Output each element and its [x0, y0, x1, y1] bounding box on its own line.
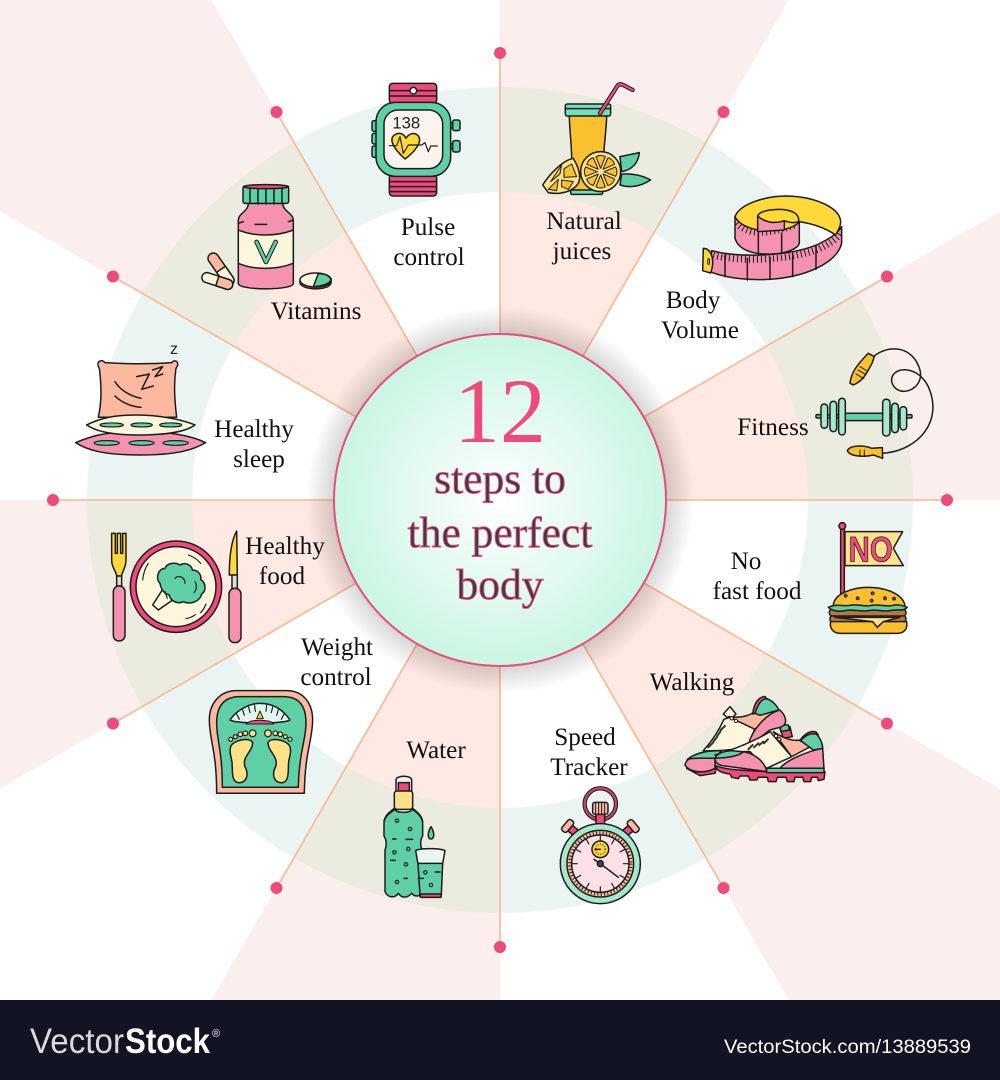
icon: sneakers: [685, 697, 825, 782]
label: water: Water: [406, 737, 466, 764]
icon: pillows: z: [170, 341, 178, 358]
label: healthy food: food: [259, 563, 305, 590]
label: healthy food: Healthy: [245, 533, 325, 560]
label: body volume: Volume: [661, 317, 739, 344]
panel: body volume: [661, 196, 842, 344]
label: fitness: Fitness: [737, 414, 809, 441]
title text: body: [456, 561, 544, 609]
icon: burger with no flag: NO: [849, 531, 893, 570]
icon: smart watch: [372, 83, 460, 196]
footer logo: Stock: [125, 1022, 210, 1061]
label: walking: Walking: [650, 669, 735, 696]
footer url: VectorStock.com/13889539: [724, 1036, 971, 1058]
icon: dumbbell and skipping rope: [816, 349, 933, 458]
label: weight control: Weight: [301, 634, 373, 661]
panel: weight control: [209, 634, 373, 793]
label: speed tracker: Tracker: [550, 754, 628, 781]
label: speed tracker: Speed: [554, 724, 616, 751]
label: vitamins: Vitamins: [271, 298, 361, 325]
label: body volume: Body: [666, 287, 721, 314]
panel: vitamins: [201, 185, 361, 325]
panel: water: [384, 737, 466, 897]
title text: the perfect: [408, 509, 592, 557]
label: no fast food: fast food: [713, 578, 802, 605]
icon: juice glass with lemons: [543, 84, 651, 194]
icon: vitamin bottle and pills: [201, 185, 331, 291]
icon: burger with no flag: [828, 523, 907, 633]
panel: natural juices: [543, 84, 651, 265]
central circle title: [334, 334, 666, 666]
icon: smart watch: 138: [392, 114, 420, 133]
icon: water bottle and glass: [384, 776, 445, 897]
central shadow: [306, 306, 694, 694]
label: healthy sleep: sleep: [233, 446, 285, 473]
icon: bathroom scale: [209, 691, 313, 793]
title number: 12: 12: [454, 360, 546, 462]
panel: fitness: [737, 349, 933, 458]
spokes with dots: [47, 47, 953, 953]
footer band: [0, 1000, 1000, 1080]
icon: measuring tape: [703, 196, 842, 280]
panel: healthy sleep: [76, 341, 294, 473]
label: pulse control: control: [393, 244, 465, 271]
panel: no fast food: [713, 523, 907, 633]
panel: walking: [650, 669, 825, 782]
title text: steps to: [434, 455, 566, 503]
icon: pillows: [76, 341, 206, 455]
label: natural juices: juices: [552, 238, 611, 265]
label: healthy sleep: Healthy: [214, 416, 294, 443]
footer logo: Vector: [30, 1022, 124, 1061]
label: pulse control: Pulse: [401, 214, 455, 241]
footer logo: ®: [212, 1028, 220, 1040]
icon: stopwatch: [560, 788, 640, 904]
icon: plate with broccoli, fork and knife: [112, 531, 241, 643]
panel: healthy food: [112, 531, 325, 643]
panel: speed tracker: [550, 724, 640, 904]
panel: pulse control: [372, 83, 465, 271]
label: no fast food: No: [731, 548, 761, 575]
label: natural juices: Natural: [546, 208, 622, 235]
label: weight control: control: [300, 664, 372, 691]
